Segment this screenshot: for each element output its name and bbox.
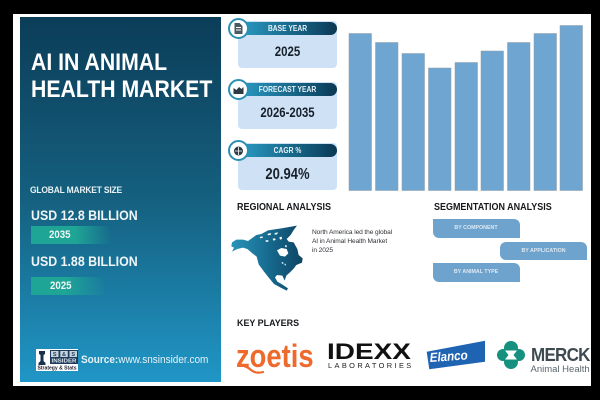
- header label: CAGR %: [274, 146, 301, 154]
- value 2025: USD 1.88 BILLION: [31, 253, 138, 269]
- year badge 2035: [31, 226, 111, 244]
- icon: document: [228, 18, 249, 39]
- value: 2025: [275, 43, 300, 59]
- bar chart: [348, 25, 583, 191]
- logo: S&S Insider: S: [71, 352, 75, 358]
- value: 20.94%: [265, 166, 310, 183]
- segment: by component: [432, 219, 520, 238]
- segment: by animal type: [432, 263, 520, 282]
- heading: regional analysis: REGIONAL ANALYSIS: [237, 201, 331, 213]
- card header: [238, 82, 337, 96]
- value: 2026-2035: [260, 104, 315, 120]
- value 2035: USD 12.8 BILLION: [31, 207, 138, 223]
- segment: by application: BY APPLICATION: [521, 248, 566, 254]
- title: HEALTH MARKET: [30, 76, 212, 102]
- icon: growth globe: [228, 140, 249, 161]
- logo: S&S Insider: &: [62, 352, 66, 358]
- card: cagr: [228, 140, 337, 190]
- title: AI IN ANIMAL: [30, 48, 167, 76]
- Merck symbol: [497, 341, 525, 369]
- title: [30, 48, 212, 102]
- logo: Elanco: Elanco: [429, 347, 468, 365]
- text: regional summary: AI in Animal Health Market: [312, 238, 387, 245]
- card body: [238, 21, 337, 68]
- logo: Elanco: [426, 340, 485, 370]
- text: regional summary: [312, 228, 392, 254]
- text: regional summary: in 2025: [312, 247, 333, 254]
- Animal Health wordmark: Animal Health: [530, 364, 590, 375]
- card header: [238, 144, 337, 157]
- text: regional summary: North America led the global: [312, 228, 392, 236]
- zoetis swoosh: [243, 366, 264, 374]
- header label: FORECAST YEAR: [259, 84, 316, 94]
- logo: S&S Insider: [36, 348, 78, 370]
- card header: [238, 22, 337, 35]
- Merck wordmark: MERCK: [530, 344, 589, 365]
- year text: 2025: [50, 280, 71, 292]
- heading: key players: KEY PLAYERS: [237, 318, 299, 329]
- card: forecast year: [228, 79, 337, 129]
- year text: 2035: [49, 229, 71, 241]
- logo: S&S Insider: INSIDER: [52, 358, 77, 364]
- logo: zoetis: [236, 338, 314, 374]
- card: base year: [228, 18, 337, 68]
- logo: Merck Animal Health: [497, 341, 590, 375]
- icon: chart: [228, 78, 249, 100]
- panel: market summary: [20, 17, 221, 382]
- logo: IDEXX Laboratories: [327, 339, 414, 370]
- map: North America: [231, 226, 303, 291]
- year badge 2025: [31, 277, 106, 295]
- source line: Source:www.snsinsider.com: [81, 354, 208, 366]
- global market size label: GLOBAL MARKET SIZE: [30, 184, 122, 196]
- IDEXX wordmark: IDEXX: [327, 339, 411, 364]
- logo: S&S Insider: S: [53, 352, 57, 358]
- card body: [238, 143, 337, 190]
- segment: by component: BY COMPONENT: [454, 225, 498, 231]
- card body: [238, 82, 337, 129]
- segment: by application: [500, 242, 587, 260]
- Laboratories wordmark: LABORATORIES: [328, 361, 414, 370]
- zoetis wordmark: zoetis: [236, 338, 314, 374]
- segment: by animal type: BY ANIMAL TYPE: [454, 269, 498, 275]
- heading: segmentation analysis: SEGMENTATION ANALYSIS: [434, 201, 552, 213]
- header label: BASE YEAR: [268, 24, 307, 32]
